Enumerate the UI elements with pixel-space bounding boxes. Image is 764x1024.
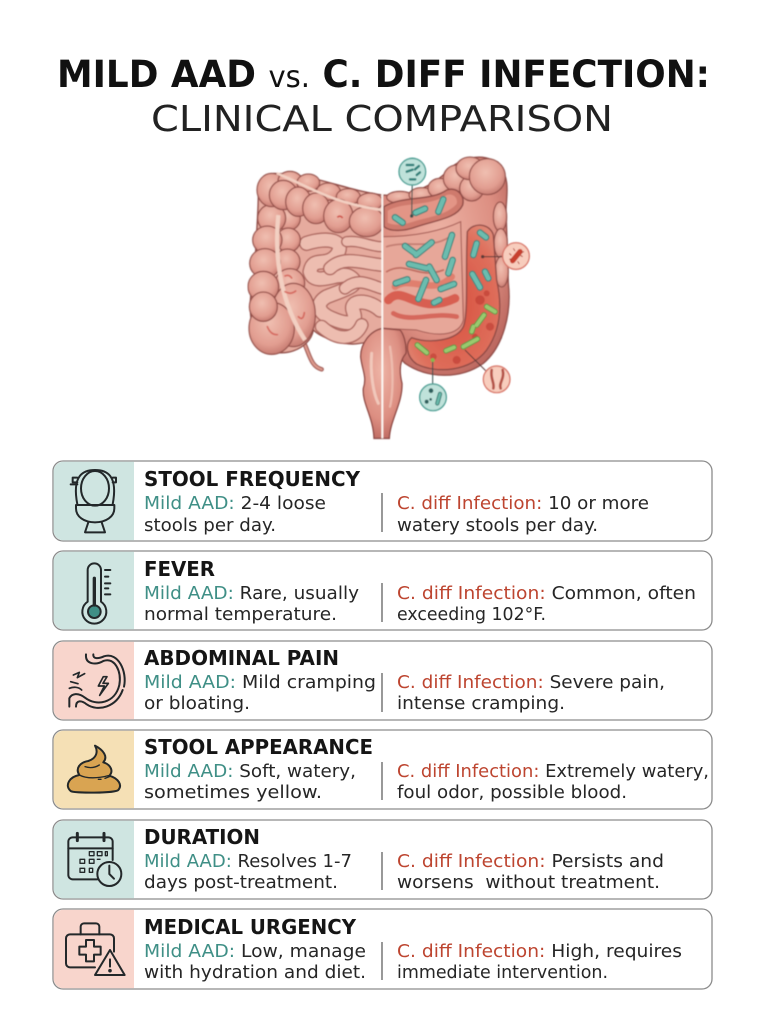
icon: thermometer — [82, 563, 110, 624]
C. diff text: C. diff Infection: High, requires — [397, 941, 682, 962]
heading: MEDICAL URGENCY — [144, 915, 357, 939]
bacteria — [395, 199, 495, 353]
mild AAD text — [144, 761, 356, 803]
title — [57, 53, 710, 140]
icon: stomach pain — [69, 654, 125, 708]
C. diff text — [397, 941, 682, 983]
icon: first aid kit with warning — [66, 923, 125, 975]
callout: teal top — [399, 158, 426, 218]
mild AAD text: Mild AAD: Mild cramping — [144, 672, 376, 693]
mild AAD text: stools per day. — [144, 515, 276, 536]
small intestine loops left — [307, 240, 382, 337]
C. diff text: watery stools per day. — [397, 515, 598, 536]
mild AAD text: with hydration and diet. — [144, 962, 366, 983]
callout: red bottom right — [465, 350, 510, 393]
C. diff text — [397, 583, 696, 625]
mild AAD text: Mild AAD: Soft, watery, — [144, 761, 356, 782]
rectum — [361, 328, 406, 438]
mild AAD text: days post-treatment. — [144, 872, 338, 893]
C. diff text: immediate intervention. — [397, 962, 608, 983]
mild AAD text — [144, 672, 376, 714]
heading: FEVER — [144, 557, 215, 581]
heading: ABDOMINAL PAIN — [144, 646, 339, 670]
C. diff text: C. diff Infection: 10 or more — [397, 493, 649, 514]
icon: stool — [68, 746, 120, 793]
C. diff text: C. diff Infection: Persists and — [397, 851, 664, 872]
mild AAD text — [144, 583, 359, 625]
heading: STOOL FREQUENCY — [144, 467, 361, 491]
panel: abdominal pain — [53, 641, 712, 720]
transverse lumen — [384, 189, 463, 230]
mild AAD text — [144, 493, 326, 536]
C. diff text: foul odor, possible blood. — [397, 782, 627, 803]
mild AAD text: sometimes yellow. — [144, 782, 322, 803]
left silhouette — [250, 173, 383, 353]
small intestine inflamed right — [383, 222, 463, 334]
mild AAD text: Mild AAD: Low, manage — [144, 941, 366, 962]
callout: red right — [481, 243, 529, 269]
mild AAD text: Mild AAD: Resolves 1-7 — [144, 851, 352, 872]
mild AAD text — [144, 941, 366, 983]
heading: STOOL APPEARANCE — [144, 735, 373, 759]
C. diff text: worsens without treatment. — [397, 872, 660, 893]
callout: teal bottom — [420, 358, 446, 411]
C. diff text — [397, 851, 664, 893]
mild AAD text — [144, 851, 352, 893]
transverse colon left — [269, 171, 384, 237]
haustra upper right — [387, 157, 508, 287]
mild AAD text: or bloating. — [144, 693, 250, 714]
panel: stool appearance — [53, 730, 712, 809]
mild AAD text: normal temperature. — [144, 604, 337, 625]
descending lumen — [407, 225, 500, 370]
panel: medical urgency — [53, 909, 712, 989]
title line 2: CLINICAL COMPARISON — [151, 99, 613, 140]
C. diff text — [397, 761, 709, 803]
colon right outer wall — [383, 157, 509, 375]
C. diff text — [397, 493, 649, 536]
panel: fever — [53, 551, 712, 630]
panel: duration — [53, 820, 712, 899]
C. diff text: C. diff Infection: Extremely watery, — [397, 761, 709, 782]
title line 1: MILD AAD vs. C. DIFF INFECTION: — [57, 53, 710, 96]
C. diff text — [397, 672, 665, 714]
C. diff text: C. diff Infection: Severe pain, — [397, 672, 665, 693]
ascending colon — [248, 173, 315, 354]
icon: toilet — [71, 470, 116, 532]
heading: DURATION — [144, 825, 260, 849]
intestine illustration — [248, 157, 529, 438]
C. diff text: exceeding 102°F. — [397, 604, 546, 625]
C. diff text: intense cramping. — [397, 693, 565, 714]
white divider line — [379, 193, 385, 438]
C. diff text: C. diff Infection: Common, often — [397, 583, 696, 604]
appendix — [305, 345, 322, 369]
mild AAD text: Mild AAD: Rare, usually — [144, 583, 359, 604]
mild AAD text: Mild AAD: 2-4 loose — [144, 493, 326, 514]
icon: calendar and clock — [68, 833, 121, 886]
panel: stool frequency — [53, 461, 712, 541]
